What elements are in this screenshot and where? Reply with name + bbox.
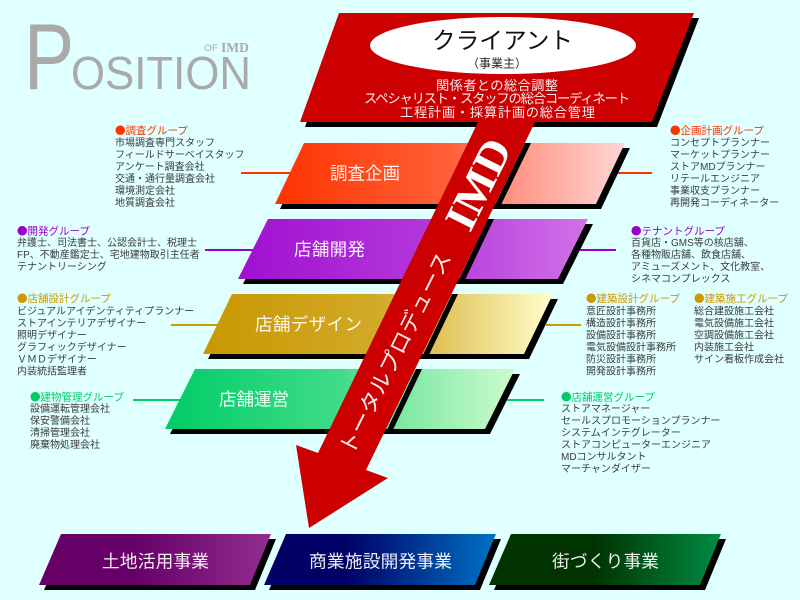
bottom panel: land use business (39, 534, 276, 590)
bottom panel: commercial facility development business (264, 534, 501, 590)
panel: research and planning layer: 調査企画 (330, 163, 400, 183)
text block: construction group: 空調設備施工会社 (694, 329, 774, 342)
client duties: 工程計画・採算計画の総合管理 (400, 105, 595, 120)
text block: store operation group: システムインテグレーター (561, 426, 681, 439)
text block: building management group: 保安警備会社 (30, 414, 90, 427)
text block: architectural design group: 開発設計事務所 (586, 365, 656, 378)
title: Position of IMD (24, 5, 251, 110)
text block: building management group: ●建物管理グループ (30, 390, 124, 404)
text block: tenant group: ●テナントグループ (631, 224, 725, 238)
text block: development group (17, 224, 200, 273)
client subheading: （事業主） (467, 56, 527, 70)
panel: research and planning layer (275, 143, 630, 209)
text block: tenant group: シネマコンプレックス (631, 273, 730, 285)
text block: building management group (30, 390, 124, 451)
client duties: スペシャリスト・スタッフの総合コーディネート (364, 90, 630, 106)
text block: research group (115, 123, 244, 209)
client duties (364, 78, 630, 120)
text block: store design group (17, 291, 194, 378)
text block: tenant group: 百貨店・GMS等の核店舗、 (631, 236, 754, 249)
text block: architectural design group: 防災設計事務所 (586, 353, 656, 366)
connector lines (133, 173, 652, 400)
arrow: total produce (296, 122, 535, 528)
text block: store design group: ●店舗設計グループ (17, 291, 111, 306)
panel: store development layer: 店舗開発 (294, 239, 365, 259)
text block: store operation group: ストアコンピューターエンジニア (561, 439, 711, 451)
text block: store operation group: ●店舗運営グループ (561, 390, 655, 404)
text block: research group: 市場調査専門スタッフ (115, 136, 215, 149)
text block: tenant group: 各種物販店舗、飲食店舗、 (631, 248, 751, 261)
text block: store design group: 内装統括監理者 (17, 365, 87, 378)
text block: research group: 交通・通行量調査会社 (115, 172, 215, 185)
text block: building management group: 設備運転管理会社 (30, 402, 110, 415)
text block: research group: アンケート調査会社 (115, 160, 205, 173)
bottom panel: town development business (489, 534, 726, 590)
panel: client (300, 13, 699, 127)
text block: store design group: グラフィックデザイナー (17, 341, 127, 354)
text block: planning group: 再開発コーディネーター (670, 196, 779, 209)
text block: planning group: コンセプトプランナー (670, 137, 770, 149)
text block: store operation group: マーチャンダイザー (561, 462, 651, 475)
text block: tenant group: アミューズメント、文化教室、 (631, 260, 770, 273)
text block: store design group: ＶＭＤデザイナー (17, 353, 97, 366)
arrow brand: IMD (435, 130, 522, 238)
text block: planning group (670, 123, 779, 209)
panel: store design layer: 店舗デザイン (255, 314, 362, 334)
text block: tenant group (631, 224, 770, 285)
title: Position of IMD: P (24, 5, 74, 110)
title: Position of IMD: OF (204, 43, 218, 54)
text block: research group: フィールドサーベイスタッフ (115, 149, 244, 161)
text block: development group: ●開発グループ (17, 224, 90, 238)
text block: planning group: ●企画計画グループ (670, 123, 764, 138)
text block: construction group: 総合建設施工会社 (694, 305, 774, 318)
text block: architectural design group (586, 291, 680, 378)
bottom panel: commercial facility development business: 商業施設開発事業 (309, 551, 452, 571)
panel: store development layer (238, 219, 593, 284)
text block: store design group: 照明デザイナー (17, 329, 87, 342)
text block: architectural design group: 設備設計事務所 (586, 329, 656, 342)
text block: research group: 地質調査会社 (115, 196, 175, 209)
text block: architectural design group: 電気設備設計事務所 (586, 341, 676, 354)
text block: development group: 弁護士、司法書士、公認会計士、税理士 (17, 236, 197, 249)
text block: construction group: ●建築施工グループ (694, 291, 788, 306)
arrow label: トータルプロデュース (335, 248, 456, 458)
client duties: 関係者との総合調整 (436, 78, 558, 93)
text block: research group: ●調査グループ (115, 123, 188, 138)
bottom panel: land use business: 土地活用事業 (102, 551, 209, 571)
text block: development group: FP、不動産鑑定士、宅地建物取引主任者 (17, 248, 200, 261)
text block: building management group: 清掃管理会社 (30, 426, 90, 439)
text block: construction group: サイン看板作成会社 (694, 353, 784, 366)
text block: planning group: ストアMDプランナー (670, 161, 766, 173)
panel: store design layer (203, 294, 558, 359)
text block: research group: 環境測定会社 (115, 184, 175, 197)
text block: store design group: ビジュアルアイデンティティプランナー (17, 305, 194, 318)
text block: architectural design group: ●建築設計グループ (586, 291, 680, 306)
title: Position of IMD: IMD (221, 41, 249, 56)
text block: construction group: 電気設備施工会社 (694, 317, 774, 330)
client heading: クライアント (432, 28, 573, 54)
text block: planning group: 事業収支プランナー (670, 184, 760, 197)
text block: construction group (694, 291, 788, 366)
text block: architectural design group: 意匠設計事務所 (586, 305, 656, 318)
text block: store operation group (561, 390, 720, 475)
text block: planning group: マーケットプランナー (670, 149, 770, 161)
panel: store operation layer: 店舗運営 (219, 389, 289, 409)
panel: store operation layer (165, 369, 520, 434)
text block: architectural design group: 構造設計事務所 (586, 317, 656, 330)
text block: construction group: 内装施工会社 (694, 341, 754, 354)
title: Position of IMD: OSITION (71, 47, 251, 99)
text block: building management group: 廃棄物処理会社 (30, 438, 100, 451)
text block: store operation group: ストアマネージャー (561, 403, 650, 415)
client ellipse (370, 17, 636, 74)
bottom panel: town development business: 街づくり事業 (552, 551, 659, 571)
text block: development group: テナントリーシング (17, 260, 107, 273)
text block: store design group: ストアインテリアデザイナー (17, 317, 146, 330)
text block: store operation group: セールスプロモーションプランナー (561, 415, 720, 427)
text block: store operation group: MDコンサルタント (561, 451, 647, 463)
text block: planning group: リテールエンジニア (670, 174, 760, 185)
